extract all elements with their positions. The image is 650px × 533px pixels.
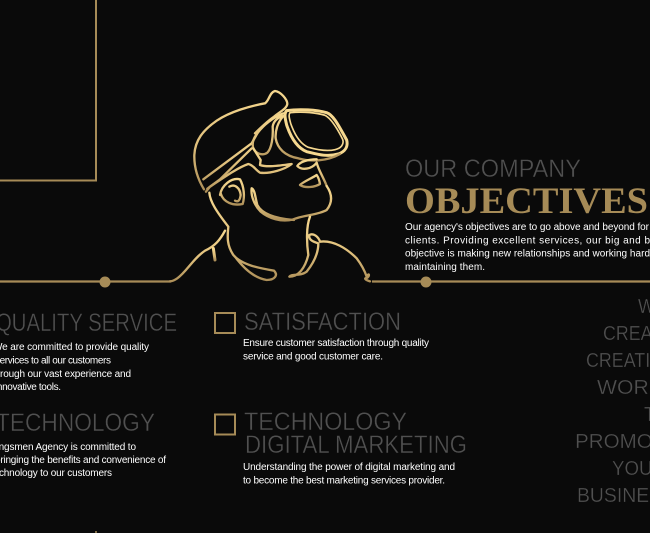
goggles inner — [289, 112, 343, 150]
text: digital marketing description: to become the best marketing services provider. — [243, 476, 445, 486]
lips — [300, 175, 320, 187]
timeline dot left — [100, 276, 110, 288]
text: satisfaction description — [243, 338, 429, 362]
chin and jaw — [251, 186, 331, 220]
ear — [220, 179, 244, 205]
checkbox: digital marketing — [215, 414, 235, 434]
text block: objectives description — [405, 222, 650, 273]
heading: OBJECTIVES: OBJECTIVES — [405, 181, 648, 222]
heading: OUR COMPANY: OUR COMPANY — [405, 155, 581, 183]
section: technology left — [0, 409, 166, 479]
neck and collar — [209, 193, 276, 280]
shoulder mark — [213, 248, 215, 260]
section: quality service — [0, 309, 177, 393]
text: satisfaction description: service and good customer care. — [243, 352, 383, 362]
goggles rear ring — [253, 113, 340, 160]
strap — [203, 133, 257, 189]
checkbox: satisfaction — [215, 313, 235, 333]
left shoulder — [170, 231, 225, 281]
heading: quality service: QUALITY SERVICE — [0, 309, 177, 337]
timeline line — [0, 276, 650, 288]
heading: technology left: TECHNOLOGY — [0, 409, 155, 437]
text block: objectives description: clients. Providing excellent services, our big and b — [405, 236, 650, 246]
text: technology description: bringing the benefits and convenience of — [0, 455, 166, 466]
text: technology description — [0, 442, 166, 479]
text: digital marketing description: Understanding the power of digital marketing and — [243, 462, 455, 473]
text block: objectives description: maintaining them. — [405, 262, 485, 273]
heading: technology digital marketing — [244, 408, 467, 459]
helmet — [194, 91, 287, 189]
cheek line — [206, 148, 292, 192]
tick mark at bottom — [95, 531, 97, 533]
goggles outer — [285, 110, 347, 155]
right neck — [289, 217, 370, 281]
slogan: we create creative works to promote your business — [575, 296, 650, 507]
heading: technology digital marketing: DIGITAL MARKETING — [245, 431, 467, 459]
text: quality service description — [0, 342, 149, 393]
heading: satisfaction: SATISFACTION — [244, 308, 401, 336]
timeline dot right — [420, 276, 432, 288]
section: technology digital marketing — [215, 408, 467, 486]
text: digital marketing description — [243, 462, 455, 486]
nose — [297, 159, 327, 186]
icon: man wearing VR headset line art — [170, 91, 370, 281]
heading: technology digital marketing: TECHNOLOGY — [244, 408, 407, 436]
text block: objectives description: objective is making new relationships and working hard — [405, 248, 650, 260]
text: satisfaction description: Ensure customer satisfaction through quality — [243, 338, 429, 349]
section: satisfaction — [215, 308, 429, 362]
text block: objectives description: Our agency's objectives are to go above and beyond for — [405, 222, 650, 233]
image frame — [0, 0, 96, 180]
